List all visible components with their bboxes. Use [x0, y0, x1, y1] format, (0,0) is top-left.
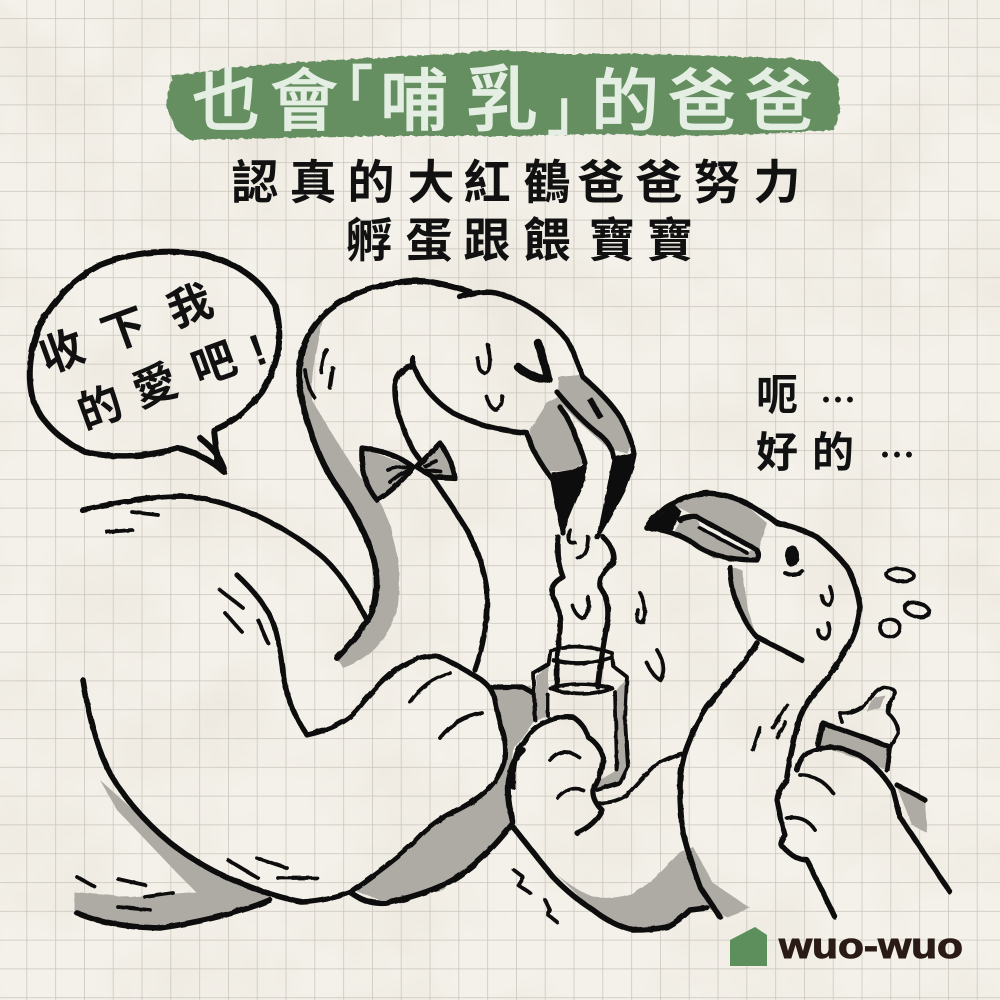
subtitle line 1: 力 — [754, 156, 800, 209]
subtitle line 2: 寶 — [646, 214, 694, 267]
reply text: 呃 — [756, 372, 798, 419]
baby neck and body — [513, 493, 860, 930]
title text: 哺 — [380, 64, 448, 140]
logo wordmark: wuo-wuo — [778, 925, 963, 966]
subtitle line 2: 寶 — [588, 214, 636, 267]
subtitle line 1: 真 — [290, 156, 336, 209]
dad body shadows — [74, 685, 535, 928]
dad beak — [530, 375, 634, 537]
title text: 乳 — [466, 61, 538, 141]
reply text: … — [820, 372, 856, 424]
subtitle line 1: 爸 — [578, 156, 624, 209]
title text: 爸 — [745, 64, 813, 140]
subtitle line 2: 蛋 — [406, 214, 452, 267]
bow tie — [362, 443, 455, 500]
subtitle line 1: 認 — [232, 156, 278, 209]
speech bubble text: 收 — [33, 322, 91, 383]
dad eye and face marks — [305, 343, 548, 409]
title banner — [166, 50, 840, 142]
title text: 「 — [317, 61, 373, 124]
subtitle line 2: 跟 — [464, 214, 510, 267]
speech bubble text: 的 — [71, 378, 129, 439]
milk jar — [533, 647, 628, 790]
reply text: … — [879, 427, 915, 479]
speech bubble text — [33, 276, 273, 439]
dad neck and head outline — [299, 281, 634, 670]
baby face and sweat — [637, 545, 931, 750]
speech bubble text: 我 — [161, 276, 219, 337]
reply text: 好 — [756, 429, 798, 476]
milk stream — [552, 530, 614, 687]
title text: 也 — [192, 64, 260, 140]
logo — [730, 925, 963, 966]
speech bubble text: ! — [243, 325, 273, 376]
title text: 的 — [591, 64, 659, 140]
dad neck shadow — [299, 320, 399, 668]
flamingo dad — [74, 281, 950, 930]
title text: 」 — [547, 79, 603, 142]
baby shadows — [555, 847, 750, 930]
subtitle line 2: 餵 — [524, 214, 570, 267]
speech bubble — [30, 252, 279, 472]
subtitle line 1 — [232, 156, 800, 209]
subtitle line 1: 鶴 — [524, 156, 570, 209]
snore marks — [514, 870, 557, 922]
subtitle line 1: 爸 — [636, 156, 682, 209]
icon: house — [730, 927, 767, 966]
dad feather marks — [77, 512, 482, 910]
dad hand — [513, 717, 603, 833]
speech bubble text: 下 — [95, 300, 153, 361]
title text: 會 — [270, 64, 338, 140]
subtitle line 2 — [346, 214, 694, 267]
reply text — [756, 372, 915, 479]
subtitle line 1: 大 — [408, 156, 454, 209]
subtitle line 1: 努 — [694, 156, 740, 209]
speech bubble text: 愛 — [126, 356, 184, 417]
title text: 爸 — [668, 64, 736, 140]
dad body and wing — [77, 496, 533, 928]
baby beak — [647, 493, 767, 560]
subtitle line 1: 紅 — [464, 156, 510, 209]
reply text: 的 — [812, 429, 854, 476]
baby hand — [777, 747, 950, 917]
subtitle line 2: 孵 — [346, 214, 392, 267]
baby bottle — [818, 687, 898, 770]
subtitle line 1: 的 — [348, 156, 394, 209]
title text — [192, 61, 813, 142]
baby flamingo — [513, 493, 950, 930]
speech bubble text: 吧 — [185, 334, 243, 395]
